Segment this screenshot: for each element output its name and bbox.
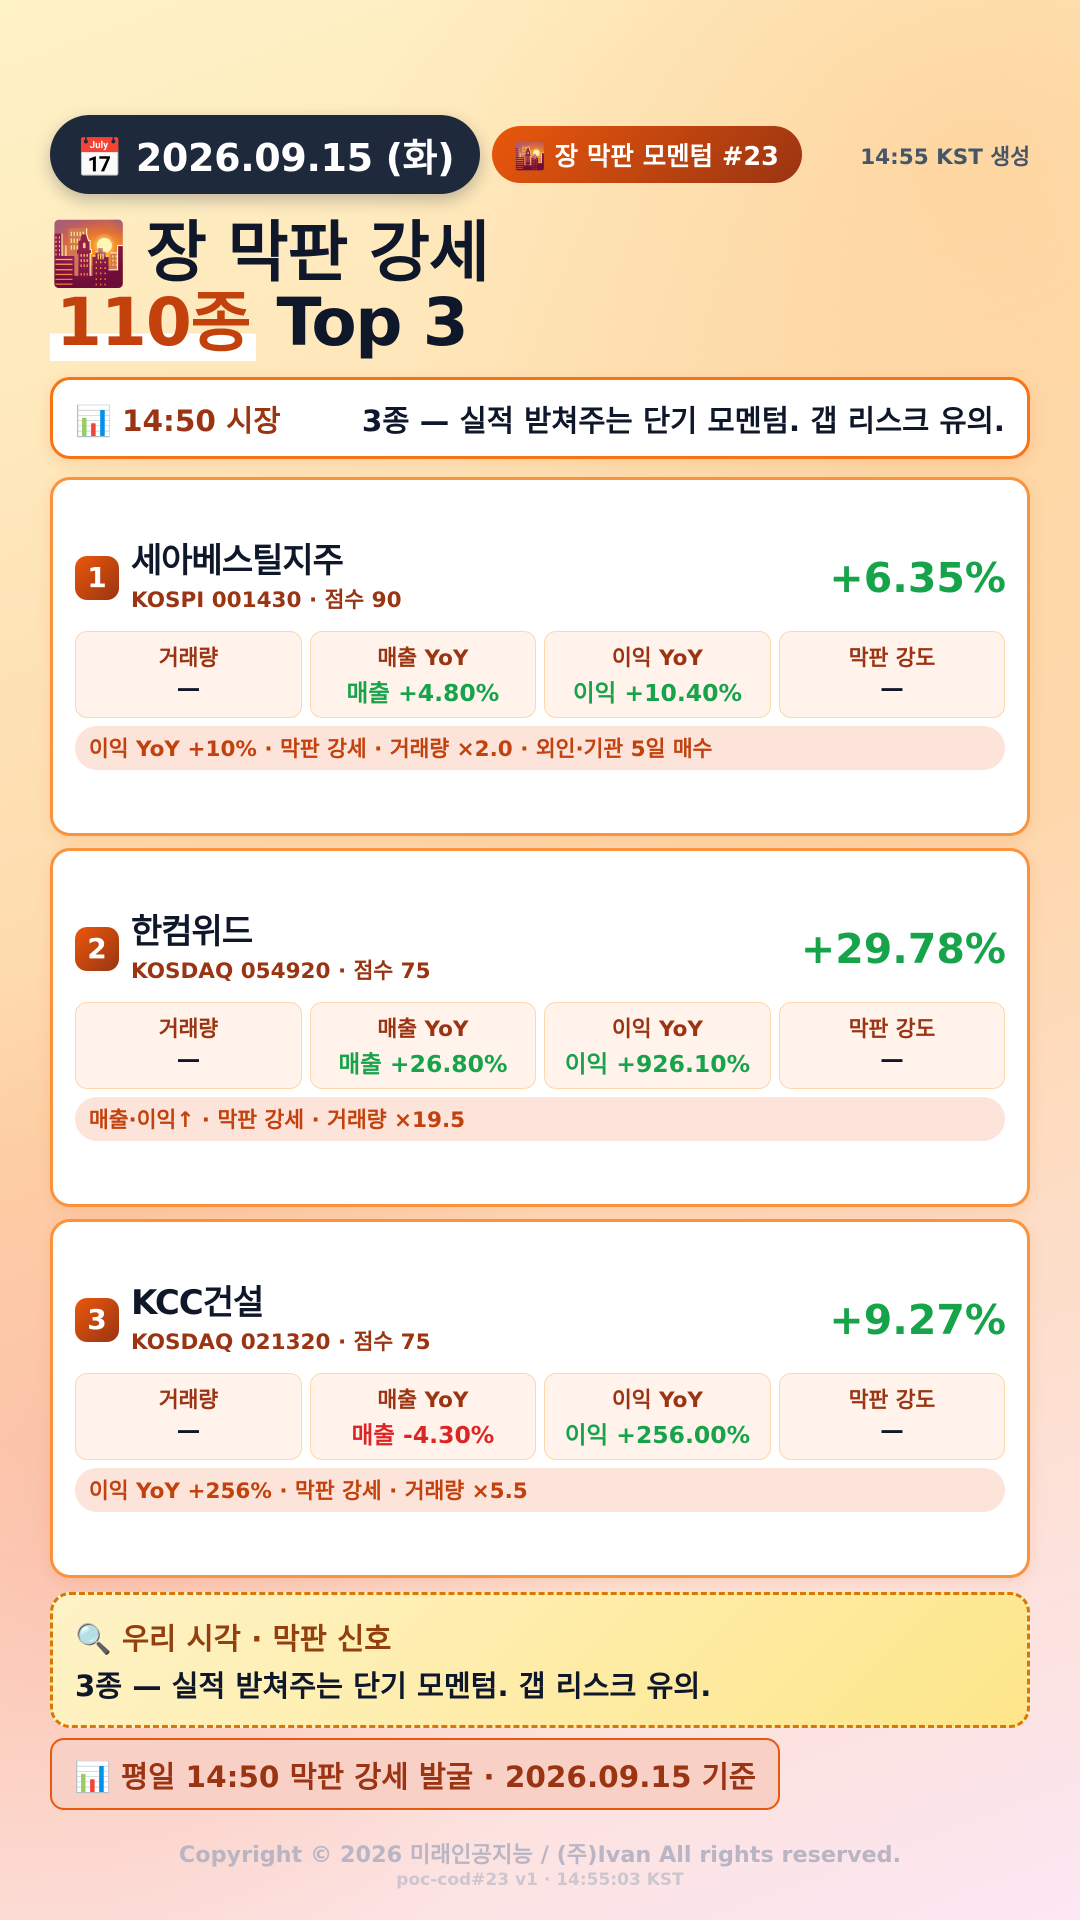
card 1: 세아베스틸지주 (50, 477, 1030, 836)
metric: volume: — (177, 674, 200, 702)
metric: profit (544, 631, 771, 718)
metric: volume: — (177, 1416, 200, 1444)
metric: strength (779, 631, 1005, 718)
rank badge (75, 927, 119, 971)
metric: profit: 이익 YoY (612, 1388, 703, 1413)
metric: revenue (310, 1373, 536, 1460)
series badge: 🌇 장 막판 모멘텀 #23 (514, 142, 779, 172)
date pill (50, 115, 480, 194)
tag line (75, 1468, 1005, 1512)
rank badge: 2 (87, 932, 107, 965)
metric: profit (544, 1002, 771, 1089)
generated time: 14:55 KST 생성 (860, 145, 1030, 170)
schedule note (50, 1738, 780, 1810)
metric: profit: 이익 +256.00% (565, 1421, 750, 1449)
stock name: 한컴위드 (131, 912, 252, 952)
title: 🌇 장 막판 강세 (50, 214, 489, 291)
tag line (75, 1097, 1005, 1141)
card 2: 한컴위드 (50, 848, 1030, 1207)
title: 110종 Top 3 (56, 284, 467, 361)
metric: strength (779, 1373, 1005, 1460)
metric: profit: 이익 +926.10% (565, 1050, 750, 1078)
metric: strength: 막판 강도 (849, 1388, 935, 1413)
metric: volume (75, 1373, 302, 1460)
tag line (75, 726, 1005, 770)
metric: volume: 거래량 (159, 646, 218, 671)
metric: revenue: 매출 +26.80% (338, 1050, 508, 1078)
metric: volume (75, 1002, 302, 1089)
series badge (492, 126, 802, 183)
metric: strength: — (880, 1416, 904, 1444)
metric: revenue (310, 631, 536, 718)
rank badge (75, 1298, 119, 1342)
ticker and score: KOSDAQ 021320 · 점수 75 (131, 1330, 431, 1355)
metric: strength (779, 1002, 1005, 1089)
change percent: +29.78% (801, 925, 1006, 973)
date pill: 📅 2026.09.15 (화) (76, 136, 454, 180)
metric: volume: — (177, 1045, 200, 1073)
change percent: +9.27% (829, 1296, 1006, 1344)
metric: volume: 거래량 (159, 1017, 218, 1042)
schedule note: 📊 평일 14:50 막판 강세 발굴 · 2026.09.15 기준 (74, 1760, 756, 1794)
rank badge: 3 (87, 1303, 107, 1336)
metric: profit: 이익 +10.40% (573, 679, 742, 707)
metric: profit: 이익 YoY (612, 646, 703, 671)
stock name: KCC건설 (131, 1283, 263, 1323)
metric: revenue: 매출 YoY (378, 1017, 468, 1042)
change percent: +6.35% (829, 554, 1006, 602)
tag line: 이익 YoY +10% · 막판 강세 · 거래량 ×2.0 · 외인·기관 5일 매수 (89, 737, 712, 762)
insight box (50, 1592, 1030, 1728)
metric: profit (544, 1373, 771, 1460)
metric: revenue: 매출 -4.30% (352, 1421, 494, 1449)
market summary text: 3종 — 실적 받쳐주는 단기 모멘텀. 갭 리스크 유의. (362, 404, 1005, 438)
metric: revenue: 매출 +4.80% (347, 679, 499, 707)
tag line: 매출·이익↑ · 막판 강세 · 거래량 ×19.5 (89, 1108, 465, 1133)
metric: strength: — (880, 1045, 904, 1073)
metric: volume: 거래량 (159, 1388, 218, 1413)
market label: 📊 14:50 시장 (75, 404, 280, 438)
card 3: KCC건설 (50, 1219, 1030, 1578)
market summary bar (50, 377, 1030, 459)
metric: revenue: 매출 YoY (378, 646, 468, 671)
title (50, 214, 489, 361)
rank badge (75, 556, 119, 600)
metric: revenue: 매출 YoY (378, 1388, 468, 1413)
metric: strength: 막판 강도 (849, 646, 935, 671)
copyright: Copyright © 2026 미래인공지능 / (주)Ivan All rights reserved. (179, 1842, 901, 1868)
metric: strength: 막판 강도 (849, 1017, 935, 1042)
stock name: 세아베스틸지주 (131, 541, 343, 581)
ticker and score: KOSPI 001430 · 점수 90 (131, 588, 402, 613)
version stamp: poc-cod#23 v1 · 14:55:03 KST (396, 1870, 684, 1890)
metric: strength: — (880, 674, 904, 702)
metric: revenue (310, 1002, 536, 1089)
ticker and score: KOSDAQ 054920 · 점수 75 (131, 959, 431, 984)
metric: volume (75, 631, 302, 718)
tag line: 이익 YoY +256% · 막판 강세 · 거래량 ×5.5 (89, 1479, 528, 1504)
metric: profit: 이익 YoY (612, 1017, 703, 1042)
insight text: 3종 — 실적 받쳐주는 단기 모멘텀. 갭 리스크 유의. (75, 1669, 711, 1703)
rank badge: 1 (87, 561, 107, 594)
insight heading: 🔍 우리 시각 · 막판 신호 (75, 1622, 391, 1656)
